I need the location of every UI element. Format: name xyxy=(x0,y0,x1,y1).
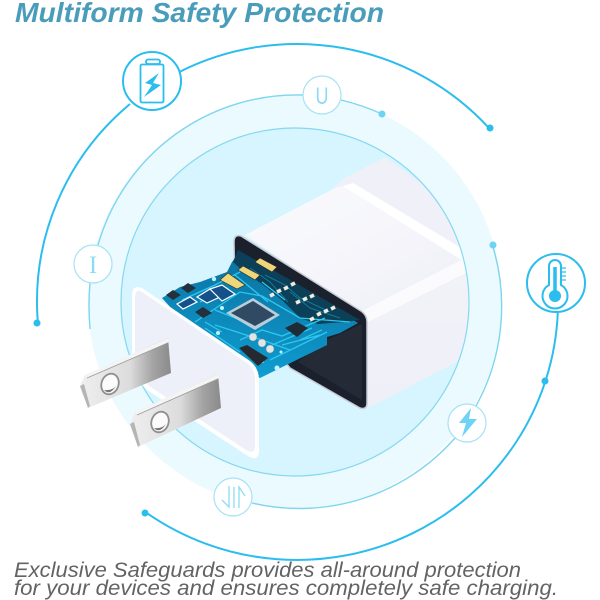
small IC xyxy=(285,322,308,337)
inner disc xyxy=(121,128,469,476)
dark square chips xyxy=(166,283,212,318)
icon: battery xyxy=(123,52,181,110)
white framed parts xyxy=(177,285,235,309)
icon: alternating current arrows xyxy=(214,478,252,516)
caption xyxy=(14,559,558,600)
dark shaded board area xyxy=(233,250,360,324)
middle ring dots xyxy=(378,110,496,248)
main processor chip xyxy=(226,298,280,330)
silver capacitors xyxy=(249,333,274,353)
middle disc xyxy=(88,95,502,509)
yellow chips xyxy=(220,258,277,289)
outer ring: blue arcs xyxy=(37,44,558,560)
board traces xyxy=(182,272,350,360)
bottom dark IC xyxy=(239,345,268,366)
icon: lightning bolt xyxy=(448,404,486,442)
icon: voltage U xyxy=(303,76,341,114)
charger mouth xyxy=(234,236,367,408)
dark area traces xyxy=(250,268,340,318)
circuit board xyxy=(162,250,360,378)
charger shell clipped to inner circle xyxy=(245,157,480,407)
plug prong upper xyxy=(80,338,171,408)
board glow points xyxy=(188,277,282,370)
inner ring stroke xyxy=(121,128,469,476)
icon: thermometer xyxy=(527,254,585,312)
plug prong lower xyxy=(130,374,221,447)
middle ring: light arcs xyxy=(89,95,502,508)
icon: voltage U: U xyxy=(316,83,328,110)
charger body xyxy=(121,128,480,476)
caption: for your devices and ensures completely safe charging. xyxy=(14,577,558,600)
plug faceplate xyxy=(132,287,259,458)
icon: current I: I xyxy=(89,252,97,279)
outer ring dots xyxy=(34,124,548,516)
icon: current I xyxy=(74,245,112,283)
caption: Exclusive Safeguards provides all-around protection xyxy=(14,559,521,582)
white components xyxy=(270,283,335,320)
